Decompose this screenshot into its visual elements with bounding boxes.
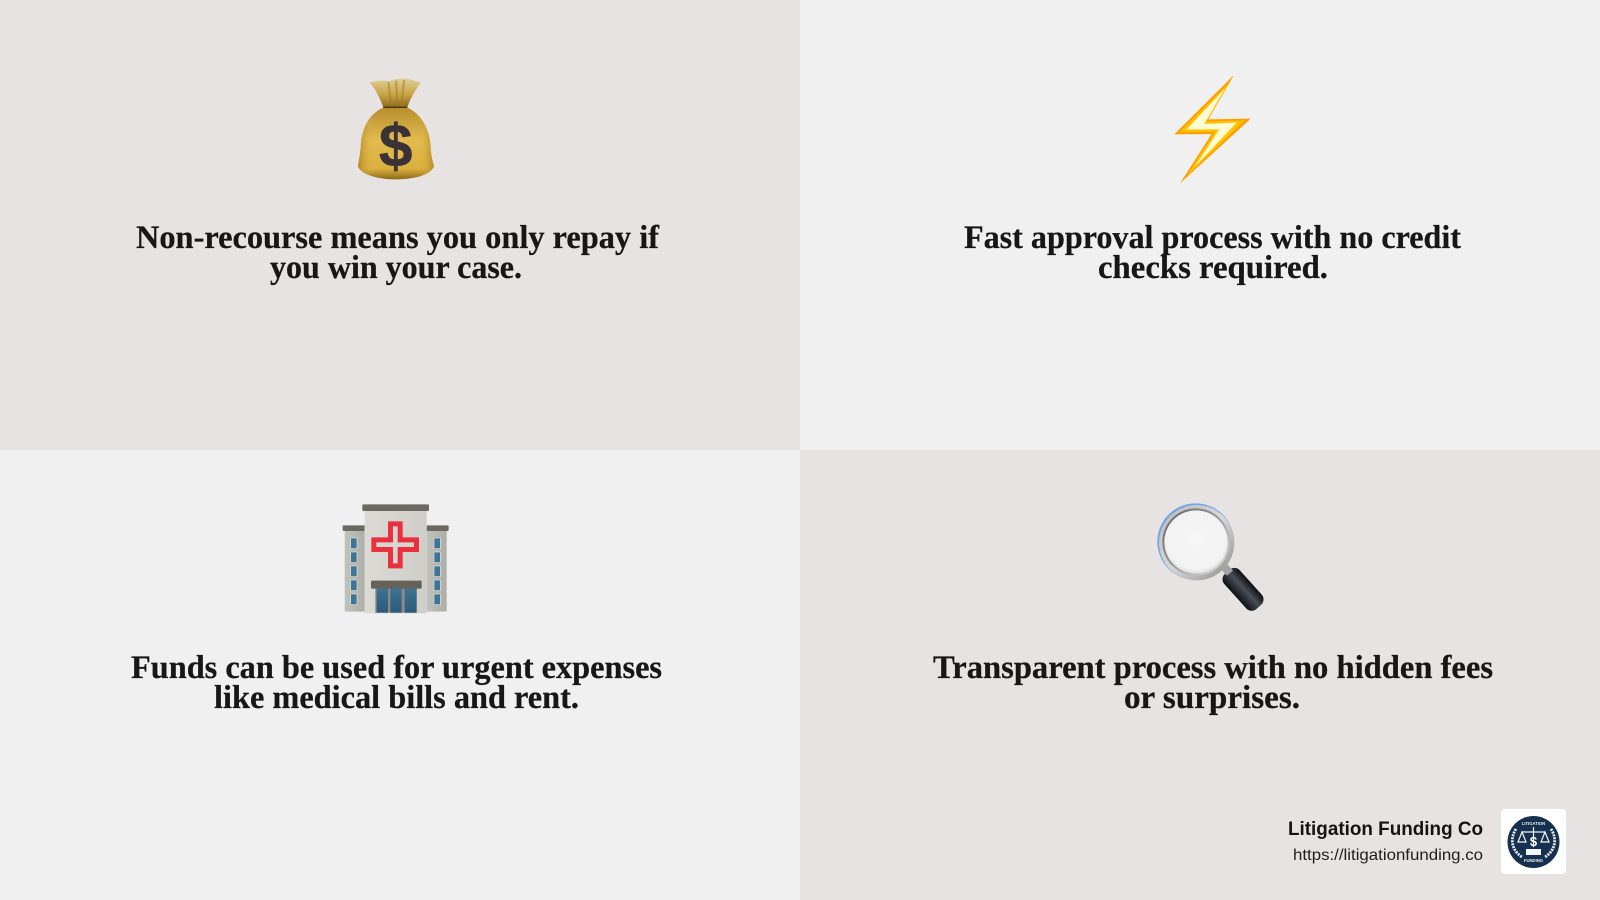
dollar sign: $ — [379, 113, 412, 180]
heading: transparency — [933, 650, 1493, 716]
heading: urgent expenses — [131, 650, 662, 716]
heading: transparency: Transparent process with no hidden fees — [933, 650, 1493, 686]
heading: fast approval: checks required. — [1098, 250, 1328, 286]
footer: brand block — [1288, 809, 1566, 874]
heading: non-recourse — [136, 220, 660, 286]
icon: lightning bolt — [1174, 75, 1251, 183]
icon: magnifying glass — [1157, 503, 1267, 614]
panel: non-recourse — [0, 0, 800, 450]
heading: urgent expenses: Funds can be used for urgent expenses — [131, 650, 662, 686]
heading: non-recourse: Non-recourse means you only repay if — [136, 220, 660, 256]
panel: urgent expenses — [0, 450, 800, 900]
heading: transparency: or surprises. — [1124, 680, 1300, 716]
logo: $ — [1530, 834, 1538, 849]
heading: fast approval — [964, 220, 1461, 286]
icon: money bag — [358, 78, 434, 180]
brand name: Litigation Funding Co — [1288, 819, 1483, 840]
heading: urgent expenses: like medical bills and rent. — [214, 680, 579, 716]
logo: LITIGATION — [1522, 821, 1545, 826]
panel: transparency — [800, 450, 1600, 900]
icon: hospital building — [343, 504, 449, 613]
panel: fast approval — [800, 0, 1600, 450]
brand url: https://litigationfunding.co — [1293, 847, 1483, 864]
heading: non-recourse: you win your case. — [270, 250, 522, 286]
logo — [1501, 809, 1566, 874]
heading: fast approval: Fast approval process with no credit — [964, 220, 1461, 256]
logo: FUNDING — [1524, 858, 1543, 863]
